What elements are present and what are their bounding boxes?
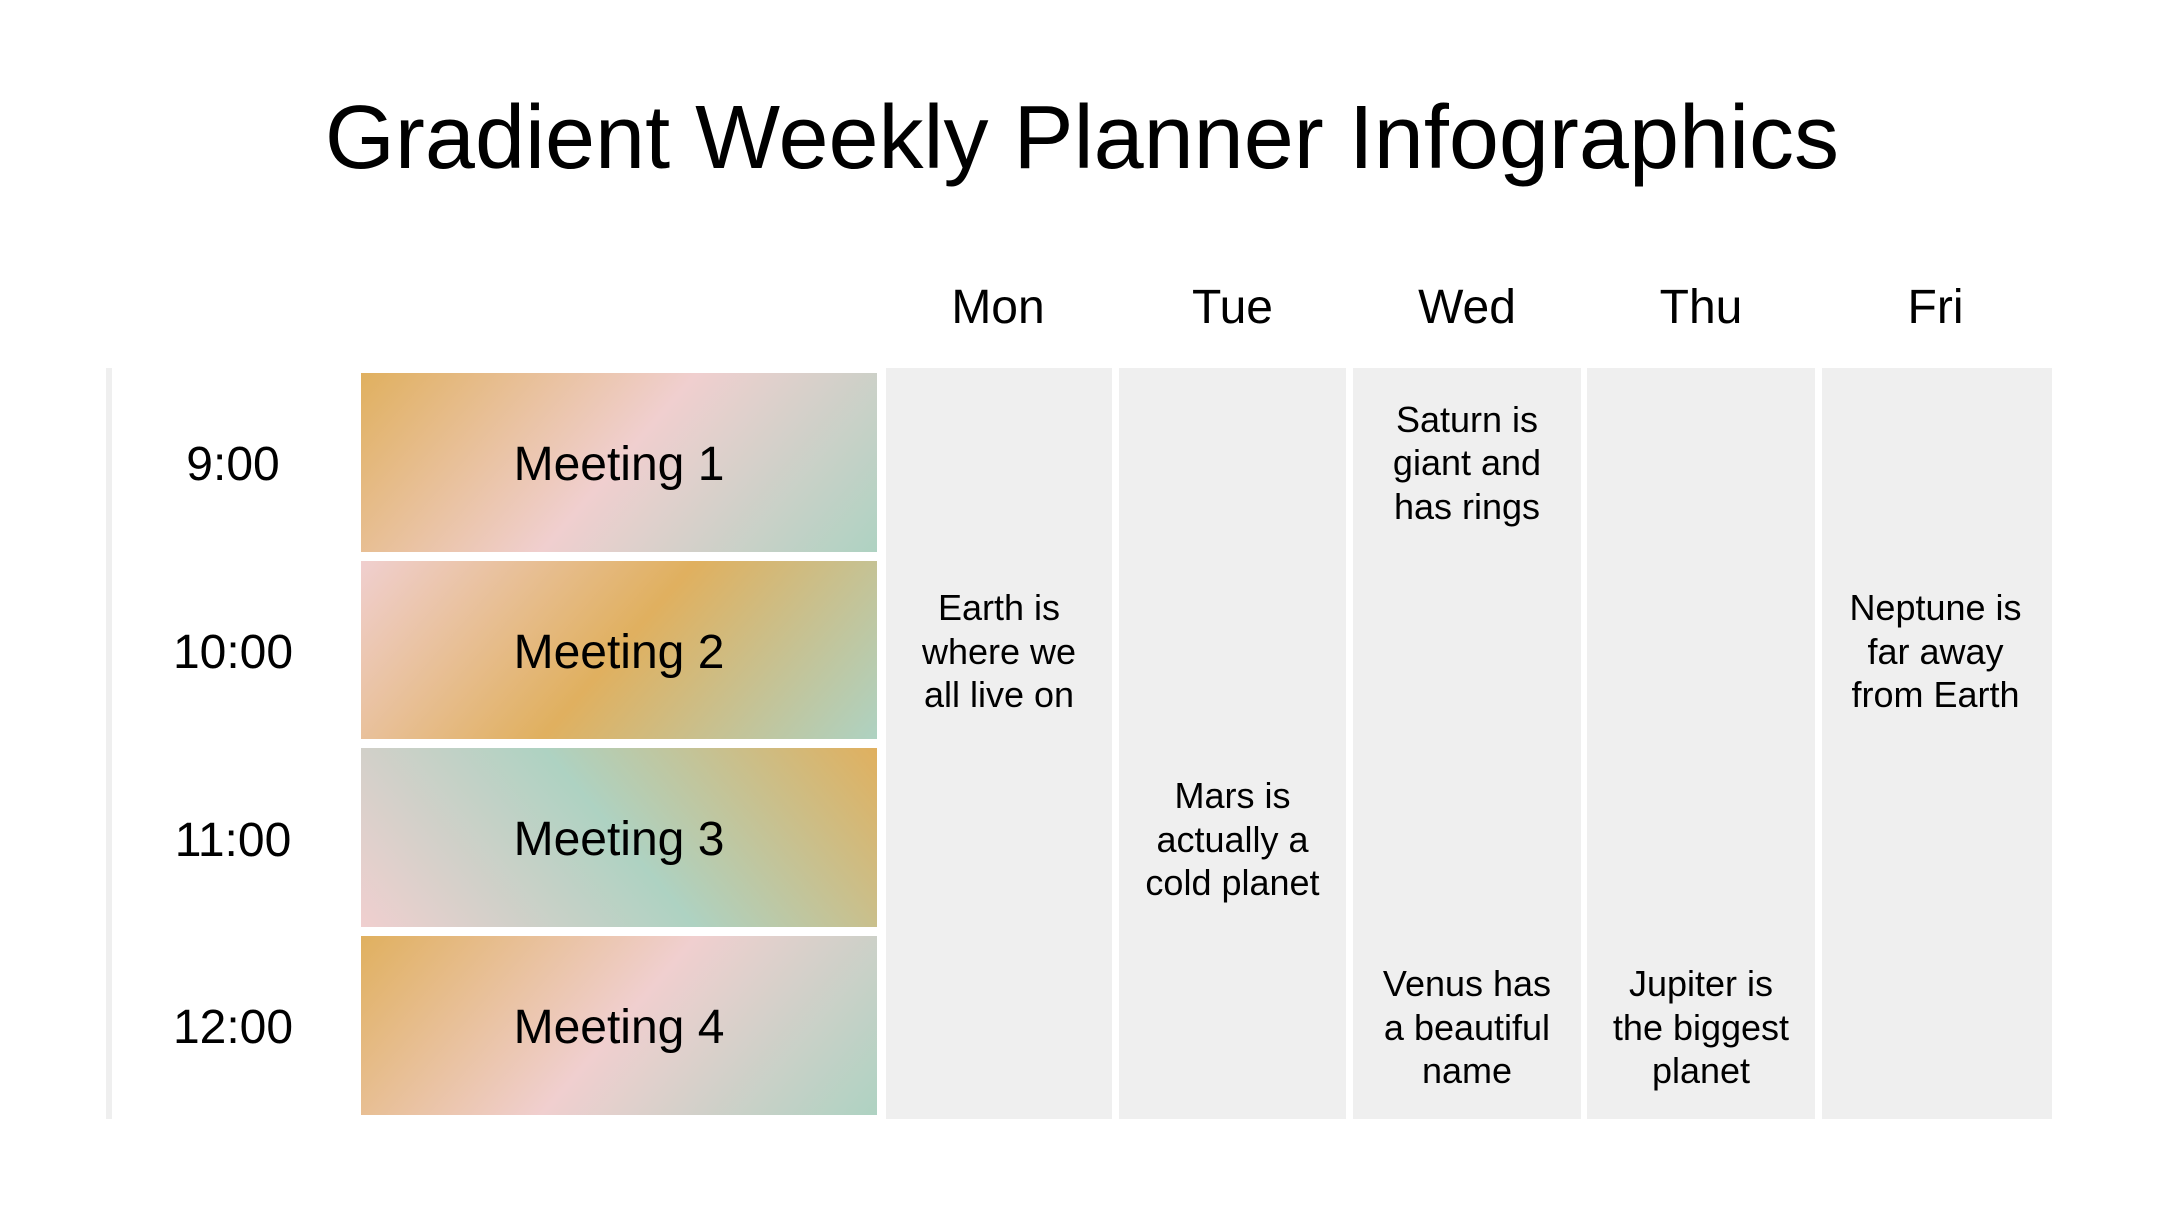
note: Saturn: has rings — [1394, 486, 1540, 527]
note: Mars: cold planet — [1145, 862, 1320, 903]
note: Neptune — [1849, 587, 2022, 715]
note: Venus: name — [1422, 1050, 1512, 1091]
title: Gradient Weekly Planner Infographics — [325, 88, 1839, 188]
note: Mars: actually a — [1156, 819, 1309, 860]
column panel: Wednesday — [1353, 368, 1581, 1119]
column panel: Tuesday — [1119, 368, 1346, 1119]
note: Earth: Earth is — [938, 587, 1060, 628]
note: Jupiter: Jupiter is — [1629, 963, 1773, 1004]
gradient block: Meeting 4: Meeting 4 — [514, 1001, 724, 1054]
note: Earth — [922, 587, 1076, 715]
note: Venus: a beautiful — [1384, 1007, 1550, 1048]
note: Saturn: Saturn is — [1396, 399, 1538, 440]
note: Venus — [1383, 963, 1551, 1091]
time label 12:00: 12:00 — [173, 1001, 293, 1054]
note: Earth: where we — [922, 631, 1076, 672]
note: Mars — [1145, 775, 1320, 903]
note: Jupiter — [1613, 963, 1789, 1091]
gradient block: Meeting 2: Meeting 2 — [514, 626, 724, 679]
note: Saturn: giant and — [1393, 442, 1541, 483]
gradient block: Meeting 3: Meeting 3 — [514, 813, 724, 866]
day heading: Friday: Fri — [1908, 281, 1963, 334]
column panel: Friday — [1822, 368, 2052, 1119]
note: Mars: Mars is — [1174, 775, 1290, 816]
gradient block: Meeting 4 — [361, 936, 877, 1115]
note: Saturn — [1393, 399, 1541, 527]
note: Venus: Venus has — [1383, 963, 1551, 1004]
note: Jupiter: planet — [1652, 1050, 1750, 1091]
note: Neptune: Neptune is — [1849, 587, 2022, 628]
note: Neptune: from Earth — [1851, 674, 2020, 715]
gradient block: Meeting 1 — [361, 373, 877, 552]
gradient block: Meeting 3 — [361, 748, 877, 927]
day heading: Thursday: Thu — [1660, 281, 1742, 334]
column panel: Monday — [886, 368, 1112, 1119]
day heading: Tuesday: Tue — [1192, 281, 1273, 334]
gradient block: Meeting 2 — [361, 561, 877, 739]
day heading: Wednesday: Wed — [1418, 281, 1516, 334]
column panel: Thursday — [1587, 368, 1815, 1119]
note: Earth: all live on — [924, 674, 1074, 715]
note: Neptune: far away — [1867, 631, 2004, 672]
time label 9:00: 9:00 — [186, 438, 280, 491]
note: Jupiter: the biggest — [1613, 1007, 1789, 1048]
left border bar of time column — [106, 368, 112, 1119]
day heading: Monday: Mon — [951, 281, 1045, 334]
time label 11:00: 11:00 — [175, 814, 291, 867]
time label 10:00: 10:00 — [173, 626, 293, 679]
gradient block: Meeting 1: Meeting 1 — [514, 438, 724, 491]
